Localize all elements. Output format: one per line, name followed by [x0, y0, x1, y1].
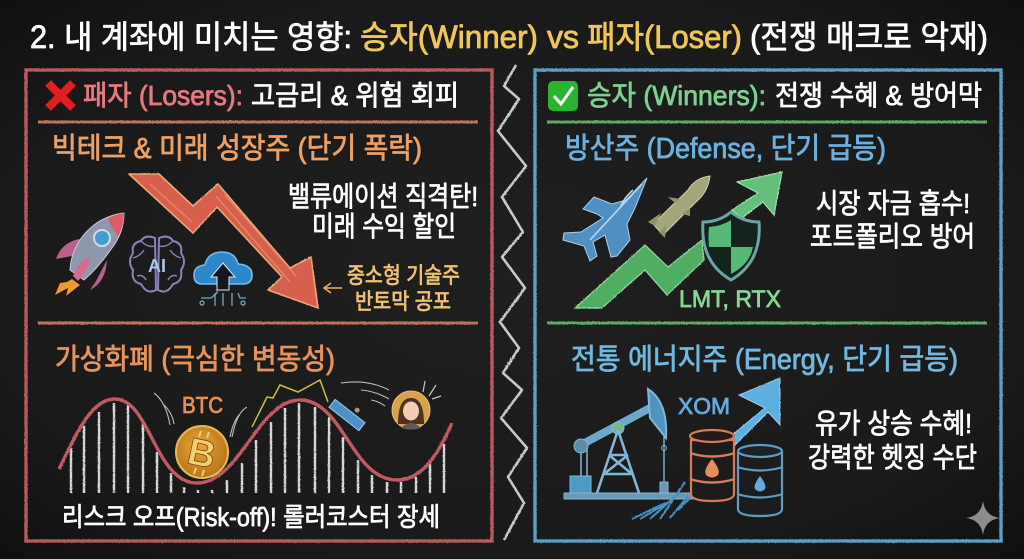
callout: market flows: 포트폴리오 방어	[810, 221, 975, 252]
losers heading: 고금리 & 위험 회피	[251, 80, 459, 111]
ticker label: defense: LMT, RTX	[679, 286, 781, 313]
icon: bitcoin coin	[176, 426, 228, 478]
subheading: energy: 전통 에너지주 (Energy, 단기 급등)	[571, 343, 958, 376]
callout: oil benefit	[808, 408, 977, 473]
icon: investor portrait	[392, 381, 441, 430]
panel: winners	[535, 70, 1001, 541]
title: 승자(Winner)	[360, 19, 538, 55]
winners heading: 승자 (Winners):	[587, 80, 766, 111]
arrow: energy lower	[632, 482, 690, 519]
icon: AI brain: AI	[148, 256, 166, 276]
caption: risk-off: 리스크 오프(Risk-off)! 롤러코스터 장세	[62, 502, 440, 532]
icon: missile	[648, 176, 710, 238]
losers heading	[83, 80, 459, 111]
callout: market flows	[810, 188, 975, 252]
BTC label: BTC	[182, 392, 223, 418]
callout: market flows: 시장 자금 흡수!	[816, 188, 970, 219]
panel frame: winners	[535, 70, 1001, 541]
icon: blue barrel	[737, 445, 783, 516]
divider	[547, 120, 987, 124]
divider	[38, 322, 478, 324]
subheading: defense: 방산주 (Defense, 단기 급등)	[565, 132, 886, 165]
losers heading: 패자 (Losers):	[83, 80, 243, 111]
growth arrow lower	[575, 240, 704, 308]
callout: small caps: 중소형 기술주	[347, 263, 460, 288]
callout: oil benefit: 강력한 헷징 수단	[808, 442, 977, 473]
arrow: energy upper	[732, 378, 780, 445]
callout: valuation	[288, 181, 478, 242]
chart: roller coaster	[59, 380, 452, 493]
winners heading	[587, 80, 982, 111]
growth arrow upper	[732, 172, 782, 218]
icon: fighter jet	[563, 178, 647, 261]
ticker label: energy: XOM	[678, 393, 730, 419]
icon: rocket	[55, 213, 124, 296]
title: (전쟁 매크로 악재)	[750, 19, 988, 55]
icon: shield	[703, 212, 759, 280]
impact burst	[252, 380, 328, 427]
icon: bitcoin coin: B	[184, 431, 219, 477]
title: vs	[547, 19, 579, 55]
title: 패자(Loser)	[587, 19, 742, 55]
coaster supports	[71, 403, 444, 493]
divider	[547, 322, 987, 324]
icon: cloud upload	[194, 252, 252, 306]
subheading: crypto: 가상화폐 (극심한 변동성)	[55, 344, 335, 376]
arrow: small cap pointer	[324, 283, 342, 293]
icon: oil pumpjack	[564, 389, 714, 499]
callout: valuation: 미래 수익 할인	[312, 211, 456, 242]
title: 2. 내 계좌에 미치는 영향:	[30, 19, 352, 55]
icon: coaster car	[329, 393, 370, 431]
icon: sparkle watermark	[966, 501, 1000, 535]
subheading: big tech: 빅테크 & 미래 성장주 (단기 폭락)	[52, 132, 422, 165]
zigzag divider	[498, 65, 527, 540]
panel: losers	[26, 70, 492, 541]
down arrow	[129, 174, 318, 308]
callout: valuation: 밸류에이션 직격탄!	[288, 181, 478, 212]
icon: check mark	[548, 81, 578, 111]
icon: orange barrel	[690, 430, 735, 501]
title	[30, 19, 988, 55]
coaster track	[59, 399, 452, 483]
motion lines	[154, 382, 389, 437]
panel frame: losers	[26, 70, 492, 541]
icon: red cross	[48, 83, 73, 108]
callout: oil benefit: 유가 상승 수혜!	[815, 408, 972, 439]
callout: small caps: 반토막 공포	[355, 289, 451, 314]
divider	[38, 120, 478, 124]
callout: small caps	[347, 263, 460, 314]
icon: AI brain	[130, 237, 184, 292]
winners heading: 전쟁 수혜 & 방어막	[775, 80, 982, 111]
